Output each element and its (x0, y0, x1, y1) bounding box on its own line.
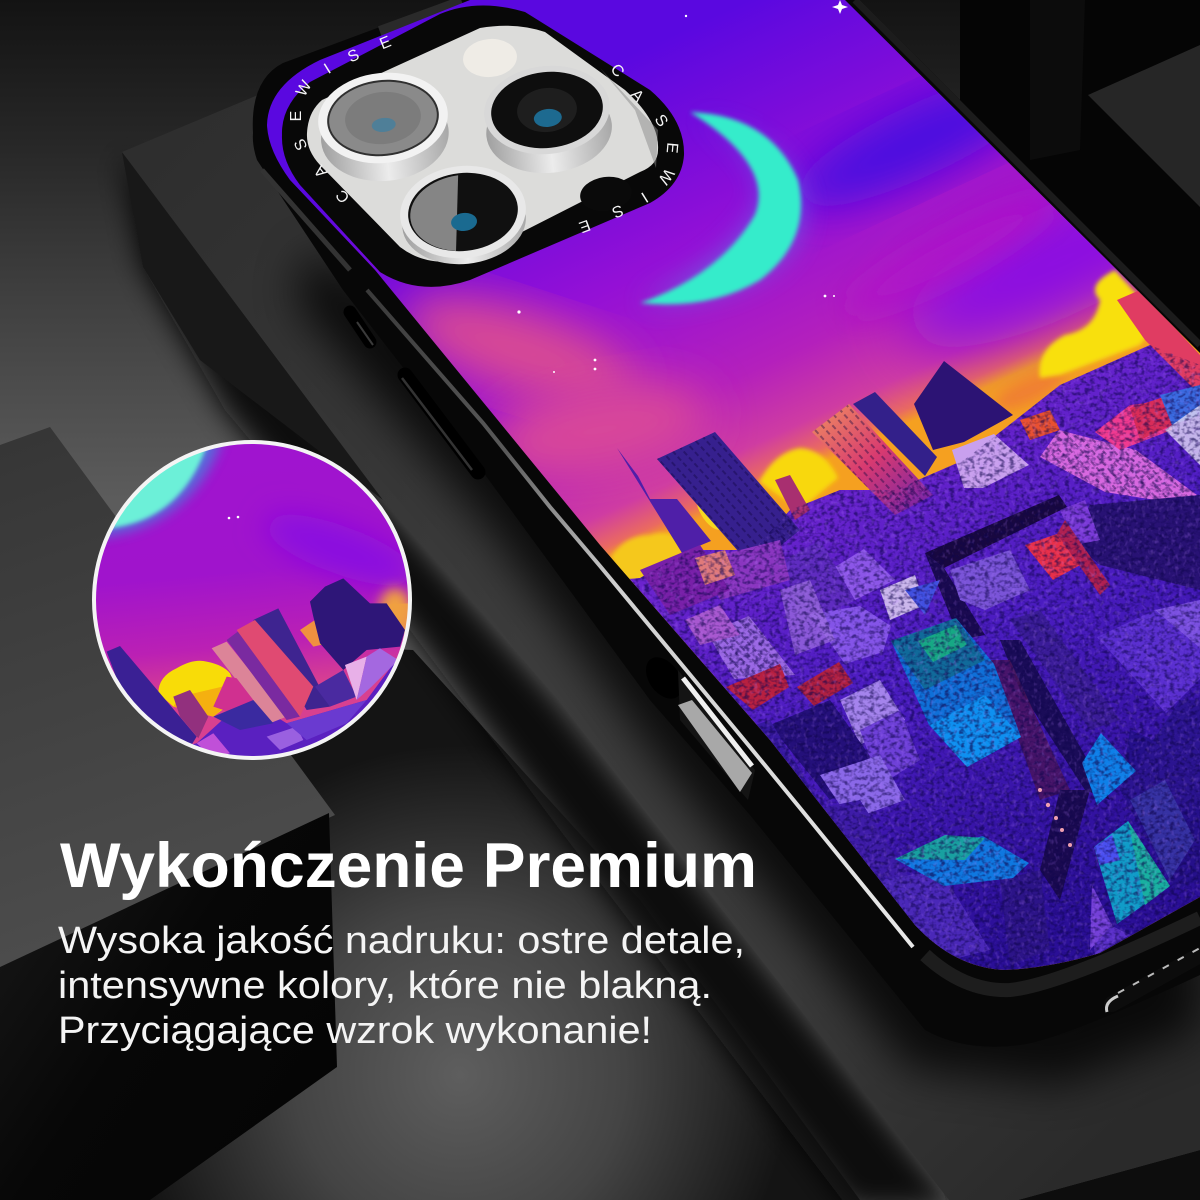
brand lettering (288, 34, 680, 235)
phone shadow (295, 250, 1200, 1085)
circle stars (228, 516, 239, 519)
stars (517, 0, 848, 373)
moon glow (640, 115, 800, 303)
brand lettering: I (638, 188, 651, 205)
top right frame (855, 0, 1200, 345)
phone art sky (267, 0, 1200, 970)
brand lettering: E (377, 34, 394, 53)
circle skyline (107, 578, 420, 763)
side buttons (350, 312, 755, 800)
mid city blocks (640, 495, 1200, 965)
charging port (1106, 948, 1200, 1012)
body text: Przyciągające wzrok wykonanie! (58, 1010, 652, 1052)
lower left block (0, 427, 337, 1200)
brand lettering: E (577, 216, 592, 235)
lens 3 (396, 160, 531, 270)
skyline towers (617, 290, 1200, 568)
circle moon glow (107, 446, 226, 543)
brand lettering: I (321, 61, 334, 78)
brand lettering: E (663, 142, 680, 154)
frame highlight (367, 290, 913, 947)
top right block (1088, 45, 1200, 207)
zoom circle (90, 430, 423, 763)
brand lettering: A (311, 161, 331, 181)
yellow clouds (611, 270, 1160, 590)
circle moon (112, 450, 208, 531)
body text: Wysoka jakość nadruku: ostre detale, (58, 920, 745, 962)
floor light (0, 640, 860, 1200)
brand lettering: C (333, 186, 353, 206)
city detail texture (630, 345, 1200, 970)
brand lettering: E (288, 111, 305, 121)
camera bump (282, 5, 684, 287)
flash (461, 37, 519, 79)
body text (58, 920, 745, 1052)
heading: Wykończenie Premium (60, 831, 757, 901)
brand lettering: S (651, 112, 671, 130)
moon crescent (640, 112, 801, 304)
city base (630, 345, 1200, 970)
brand lettering: S (291, 136, 311, 153)
microphone hole (578, 174, 634, 214)
camera plate (307, 26, 658, 262)
brand lettering: S (345, 46, 362, 66)
phone body (252, 0, 1200, 1012)
body text: intensywne kolory, które nie blakną. (58, 965, 712, 1007)
lens 2 (480, 60, 616, 179)
case frame gloss (925, 918, 1200, 990)
street lights (1038, 788, 1072, 847)
block side face (122, 152, 960, 1200)
brand lettering: W (654, 165, 677, 188)
brand lettering: C (607, 61, 627, 81)
lens 1 (314, 66, 454, 187)
brand lettering: S (609, 201, 626, 220)
blue neon buildings (891, 618, 1170, 950)
brand lettering: A (627, 86, 647, 106)
brand lettering: W (293, 77, 316, 100)
circle border (94, 442, 410, 758)
